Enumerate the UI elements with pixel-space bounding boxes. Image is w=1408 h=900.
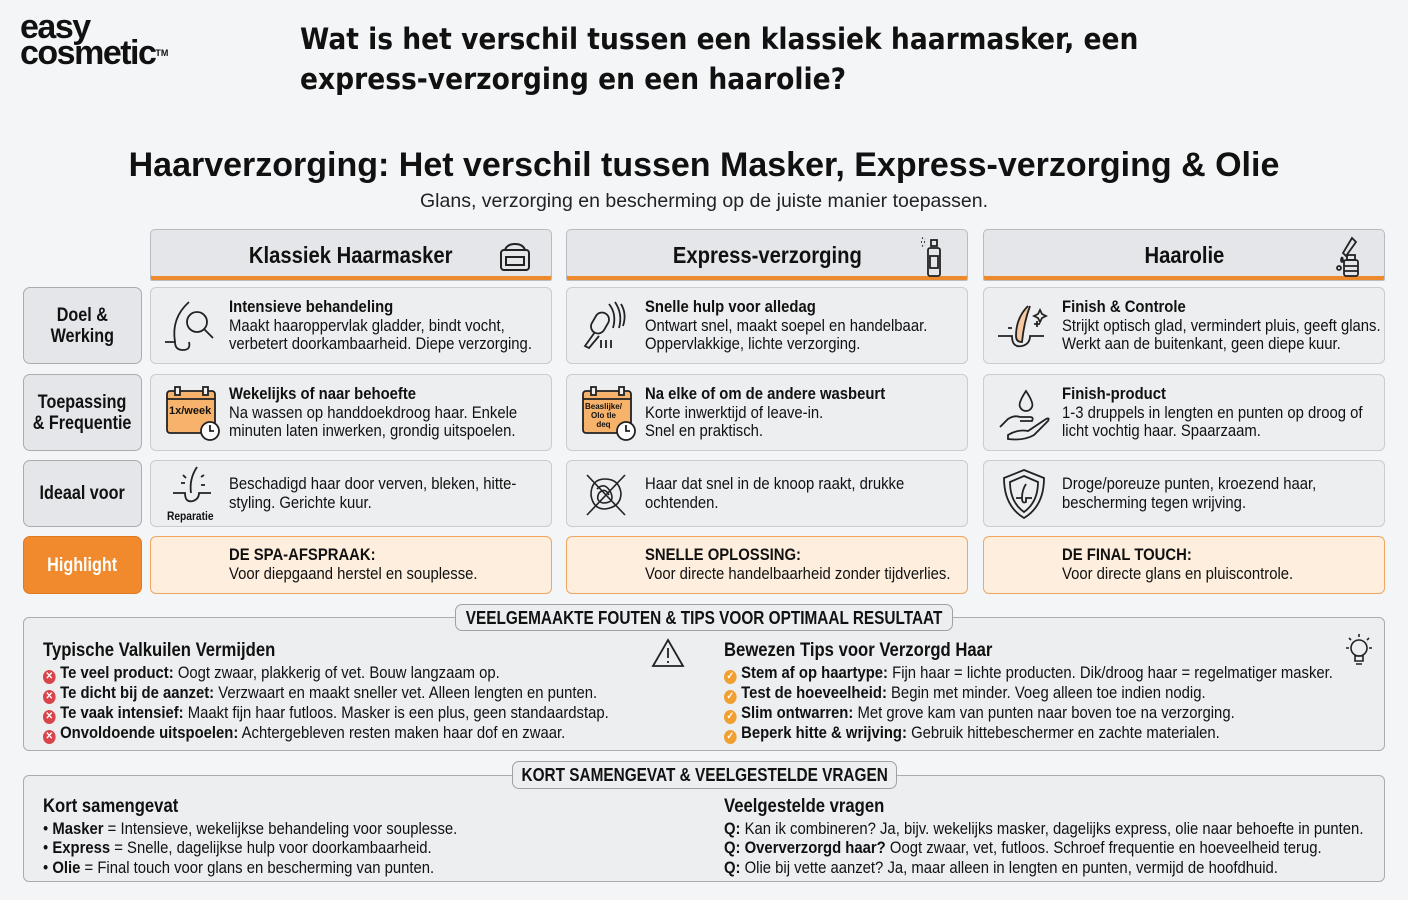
cell: masker ideaal: [150, 460, 552, 527]
cell: olie ideaal: bescherming tegen wrijving.: [1062, 494, 1246, 512]
block: FAQ: Q: Kan ik combineren? Ja, bijv. wekelijks masker, dagelijks express, olie naar behoefte in punten.: [724, 820, 1363, 838]
highlight: olie: DE FINAL TOUCH:: [1062, 546, 1192, 564]
column header: Haarolie: [983, 229, 1385, 281]
panel: fouten & tips: [23, 617, 1385, 751]
cell: express toepassing: Na elke of om de andere wasbeurt: [645, 385, 885, 403]
block: valkuilen: Te dicht bij de aanzet: Verzwaart en maakt sneller vet. Alleen lengten en punten.: [60, 684, 597, 702]
block: kort samengevat: • Express = Snelle, dagelijkse hulp voor doorkambaarheid.: [43, 839, 432, 857]
column header: Express-verzorging: [566, 229, 968, 281]
highlight: masker: [150, 536, 552, 594]
block: valkuilen: ✕: [46, 671, 53, 682]
icon: calendar daily: [582, 386, 636, 441]
row label: Doel & Werking: Doel &: [57, 304, 108, 326]
cell: masker toepassing: Na wassen op handdoekdroog haar. Enkele: [229, 404, 517, 422]
column header: Klassiek Haarmasker: [150, 229, 552, 281]
row label: Highlight: Highlight: [48, 554, 117, 576]
block: kort samengevat: [43, 795, 457, 877]
cell: olie toepassing: [983, 374, 1385, 451]
block: tips: ✓: [727, 731, 734, 742]
cell: olie toepassing: Finish-product: [1062, 385, 1166, 403]
cell: masker ideaal: Beschadigd haar door verven, bleken, hitte-: [229, 475, 516, 493]
icon: calendar 1x/week: [166, 386, 220, 441]
icon: lightbulb: [1346, 634, 1372, 665]
icon: repair hair: [167, 466, 214, 523]
block: tips: Stem af op haartype: Fijn haar = lichte producten. Dik/droog haar = regelmatiger masker.: [741, 664, 1333, 682]
block: valkuilen: Onvoldoende uitspoelen: Achtergebleven resten maken haar dof en zwaar.: [60, 724, 565, 742]
icon: shield: [1003, 469, 1045, 519]
block: kort samengevat: Kort samengevat: [43, 795, 178, 817]
icon: calendar daily: Beaslijke/: [585, 402, 622, 411]
tab: fouten & tips: VEELGEMAAKTE FOUTEN & TIPS VOOR OPTIMAAL RESULTAAT: [466, 606, 942, 628]
highlight: express: Voor directe handelbaarheid zonder tijdverlies.: [645, 564, 950, 582]
block: tips: Test de hoeveelheid: Begin met minder. Voeg alleen toe indien nodig.: [741, 684, 1206, 702]
column header: Express-verzorging: Express-verzorging: [673, 242, 861, 268]
cell: olie doel: [983, 287, 1385, 364]
cell: masker doel: verbetert doorkambaarheid. Diepe verzorging.: [229, 335, 532, 353]
page title: express-verzorging en een haarolie?: [300, 62, 846, 96]
cell: express doel: Oppervlakkige, lichte verzorging.: [645, 335, 860, 353]
cell: express doel: [566, 287, 968, 364]
highlight: olie: [983, 536, 1385, 594]
cell: olie toepassing: licht vochtig haar. Spaarzaam.: [1062, 422, 1261, 440]
main heading: Haarverzorging: Het verschil tussen Masker, Express-verzorging & Olie: [129, 146, 1279, 184]
highlight: olie: Voor directe glans en pluiscontrole.: [1062, 564, 1293, 582]
row label: Doel & Werking: Werking: [51, 326, 114, 346]
row label: Ideaal voor: [23, 460, 142, 527]
logo: cosmeticTM: [20, 34, 168, 72]
cell: masker doel: Intensieve behandeling: [229, 298, 393, 316]
block: tips: Beperk hitte & wrijving: Gebruik hittebeschermer en zachte materialen.: [741, 724, 1220, 742]
cell: express doel: Ontwart snel, maakt soepel en handelbaar.: [645, 316, 927, 334]
cell: olie doel: Finish & Controle: [1062, 298, 1186, 316]
icon: hand with drop: [999, 390, 1050, 440]
icon: shiny hair: [998, 305, 1048, 348]
logo: [20, 8, 168, 72]
icon: brush: [584, 302, 626, 350]
block: valkuilen: [43, 639, 609, 744]
block: tips: ✓: [727, 711, 734, 722]
highlight: express: [566, 536, 968, 594]
page title: Wat is het verschil tussen een klassiek haarmasker, een: [300, 22, 1138, 56]
row label: Toepassing & Frequentie: [23, 374, 142, 451]
cell: masker doel: [150, 287, 552, 364]
block: valkuilen: Te vaak intensief: Maakt fijn haar futloos. Masker is een plus, geen standaardstap.: [60, 704, 609, 722]
row label: Toepassing & Frequentie: Toepassing: [38, 392, 127, 412]
block: tips: Slim ontwarren: Met grove kam van punten naar boven toe na verzorging.: [741, 704, 1235, 722]
icon: calendar 1x/week: 1x/week: [169, 405, 211, 417]
cell: olie toepassing: 1-3 druppels in lengten en punten op droog of: [1062, 404, 1363, 422]
cell: express toepassing: Snel en praktisch.: [645, 422, 763, 440]
cell: express doel: Snelle hulp voor alledag: [645, 298, 816, 316]
page title: [300, 22, 1138, 96]
block: kort samengevat: • Masker = Intensieve, wekelijkse behandeling voor souplesse.: [43, 820, 457, 838]
cell: olie doel: Strijkt optisch glad, vermindert pluis, geeft glans.: [1062, 316, 1381, 334]
block: FAQ: Q: Olie bij vette aanzet? Ja, maar alleen in lengten en punten, vermijd de hoofdhuid.: [724, 859, 1278, 877]
icon: calendar daily: Olo tle: [591, 411, 616, 420]
row label: Highlight: [23, 536, 142, 594]
column header: Klassiek Haarmasker: Klassiek Haarmasker: [249, 242, 453, 268]
block: kort samengevat: • Olie = Final touch voor glans en bescherming van punten.: [43, 859, 434, 877]
cell: express ideaal: ochtenden.: [645, 494, 718, 512]
cell: olie ideaal: Droge/poreuze punten, kroezend haar,: [1062, 475, 1316, 493]
block: FAQ: Veelgestelde vragen: [724, 795, 884, 817]
block: tips: [724, 639, 1333, 744]
icon: tangled hair: [586, 474, 626, 516]
cell: masker ideaal: styling. Gerichte kuur.: [229, 494, 372, 512]
block: valkuilen: ✕: [46, 711, 53, 722]
tab: samenvatting: KORT SAMENGEVAT & VEELGESTELDE VRAGEN: [521, 764, 888, 785]
highlight: masker: DE SPA-AFSPRAAK:: [229, 546, 376, 564]
panel: samenvatting & FAQ: [23, 775, 1385, 882]
cell: express toepassing: Korte inwerktijd of leave-in.: [645, 404, 823, 422]
icon: calendar daily: deq: [596, 420, 611, 429]
icon: warning: [652, 638, 684, 667]
highlight: express: SNELLE OPLOSSING:: [645, 546, 801, 564]
icon: repair hair: Reparatie: [167, 509, 213, 523]
cell: express ideaal: [566, 460, 968, 527]
cell: masker toepassing: minuten laten inwerken, grondig uitspoelen.: [229, 422, 515, 440]
row label: Doel & Werking: [23, 287, 142, 364]
row label: Toepassing & Frequentie: & Frequentie: [33, 412, 132, 434]
block: tips: ✓: [727, 691, 734, 702]
cell: express toepassing: [566, 374, 968, 451]
cell: masker doel: Maakt haaroppervlak gladder, bindt vocht,: [229, 316, 505, 334]
block: valkuilen: ✕: [46, 691, 53, 702]
icon: hair magnifier: [165, 301, 214, 351]
logo: easy: [20, 8, 90, 46]
subtitle: Glans, verzorging en bescherming op de juiste manier toepassen.: [420, 190, 988, 212]
cell: masker toepassing: [150, 374, 552, 451]
block: valkuilen: Typische Valkuilen Vermijden: [43, 639, 275, 661]
highlight: masker: Voor diepgaand herstel en souplesse.: [229, 564, 478, 582]
block: tips: ✓: [727, 671, 734, 682]
cell: olie doel: Werkt aan de buitenkant, geen diepe kuur.: [1062, 335, 1341, 353]
block: valkuilen: ✕: [46, 731, 53, 742]
block: FAQ: [724, 795, 1363, 877]
row label: Ideaal voor: Ideaal voor: [40, 483, 125, 504]
block: valkuilen: Te veel product: Oogt zwaar, plakkerig of vet. Bouw langzaam op.: [60, 664, 500, 682]
block: tips: Bewezen Tips voor Verzorgd Haar: [724, 639, 992, 661]
block: FAQ: Q: Oververzorgd haar? Oogt zwaar, vet, futloos. Schroef frequentie en hoeveelheid terug.: [724, 839, 1322, 857]
cell: express ideaal: Haar dat snel in de knoop raakt, drukke: [645, 475, 904, 493]
column header: Haarolie: Haarolie: [1144, 242, 1224, 268]
cell: masker toepassing: Wekelijks of naar behoefte: [229, 385, 416, 403]
cell: olie ideaal: [983, 460, 1385, 527]
